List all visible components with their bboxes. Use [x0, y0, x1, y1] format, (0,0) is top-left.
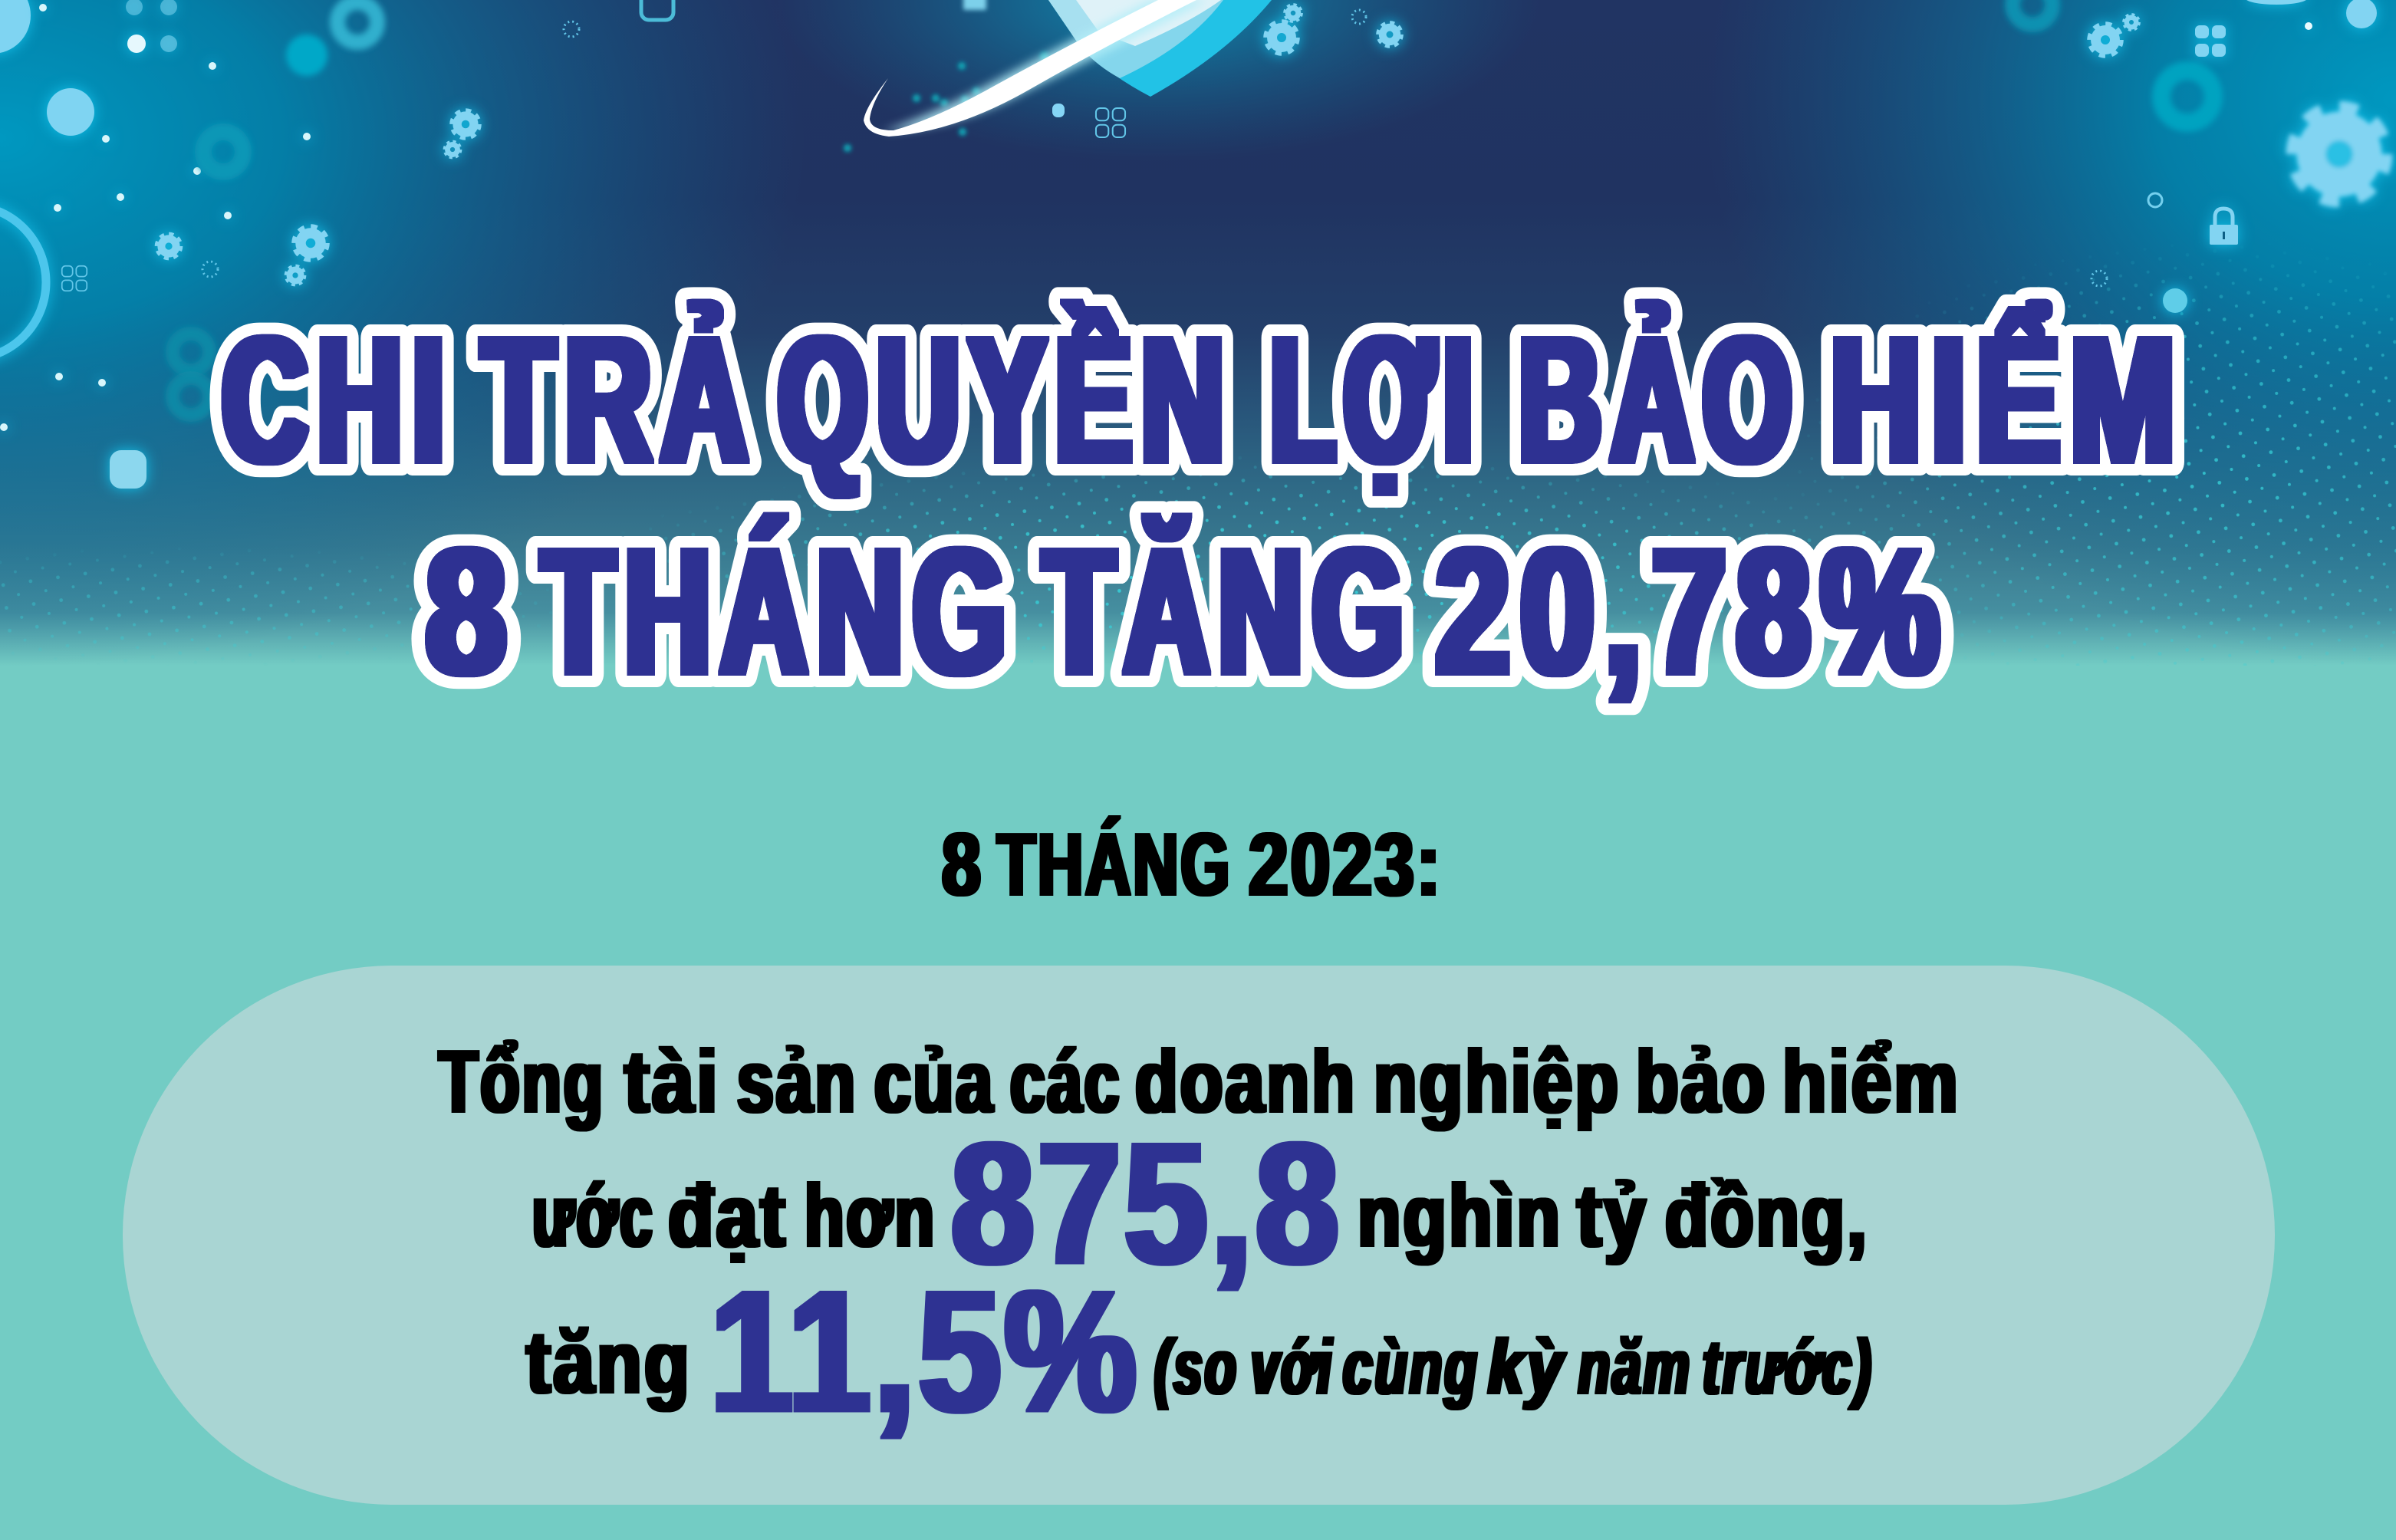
text: total assets statement line 1: Tổng	[439, 1032, 605, 1131]
subheading: 8 tháng 2023	[942, 814, 1443, 914]
panel: rounded statistic pill	[123, 966, 2275, 1505]
title: two-line outlined headline: 20,78%	[1436, 511, 1950, 712]
text: total assets statement line 1: tài	[624, 1032, 720, 1131]
text: total assets statement line 2: hơn	[805, 1166, 936, 1265]
icons: left technology cluster	[0, 0, 673, 489]
subheading: 8 tháng 2023: THÁNG	[997, 814, 1232, 914]
text: total assets statement line 1: của	[874, 1032, 995, 1131]
icon: padlock	[2210, 209, 2238, 245]
icon: shield with light streak	[864, 0, 1272, 137]
text: total assets statement line 2: đồng,	[1665, 1166, 1869, 1265]
text: increase label: tăng	[526, 1312, 692, 1412]
text: comparison note: với	[1251, 1324, 1334, 1410]
text: total assets statement line 2: ước	[532, 1166, 654, 1265]
title: two-line outlined headline: TĂNG	[1043, 511, 1413, 712]
icons: gears and chips around the shield	[844, 0, 1401, 152]
number: 11,5%: 11,5%	[710, 1254, 1140, 1448]
title: two-line outlined headline: BẢO	[1519, 299, 1801, 500]
text: total assets statement line 1: các	[1010, 1032, 1121, 1131]
title: two-line outlined headline: THÁNG	[541, 511, 1015, 712]
text: total assets statement line 1: doanh	[1135, 1032, 1357, 1131]
text: total assets statement line 1: bảo	[1636, 1032, 1767, 1131]
number: 875,8: 875,8	[951, 1106, 1342, 1300]
icons: right technology cluster	[2013, 0, 2385, 313]
text: comparison note: (so	[1154, 1324, 1239, 1410]
title: two-line outlined headline: TRẢ	[482, 299, 757, 500]
text: total assets statement line 1: nghiệp	[1374, 1032, 1621, 1131]
title: two-line outlined headline: HIỂM	[1830, 299, 2185, 500]
title: two-line outlined headline: CHI	[222, 299, 454, 500]
particle wave dots	[0, 254, 2396, 666]
text: comparison note: kỳ	[1488, 1324, 1566, 1410]
text: total assets statement line 2: tỷ	[1577, 1166, 1648, 1265]
text: total assets statement line 1: hiểm	[1782, 1032, 1960, 1131]
text: total assets statement line 2	[532, 1166, 1869, 1265]
text: total assets statement line 1: sản	[737, 1032, 857, 1131]
title: two-line outlined headline	[222, 299, 2185, 712]
text: comparison note	[1154, 1324, 1874, 1410]
subheading: 8 tháng 2023: 2023:	[1249, 814, 1443, 914]
text: comparison note: năm	[1578, 1324, 1692, 1410]
text: total assets statement line 2: nghìn	[1358, 1166, 1562, 1265]
text: comparison note: trước)	[1703, 1324, 1874, 1410]
subheading: 8 tháng 2023: 8	[942, 814, 983, 914]
title: two-line outlined headline: LỢI	[1270, 299, 1481, 500]
text: total assets statement line 1	[439, 1032, 1960, 1131]
text: total assets statement line 2: đạt	[668, 1166, 788, 1265]
text: comparison note: cùng	[1343, 1324, 1479, 1410]
title: two-line outlined headline: 8	[426, 511, 518, 712]
title: two-line outlined headline: QUYỀN	[778, 299, 1233, 500]
